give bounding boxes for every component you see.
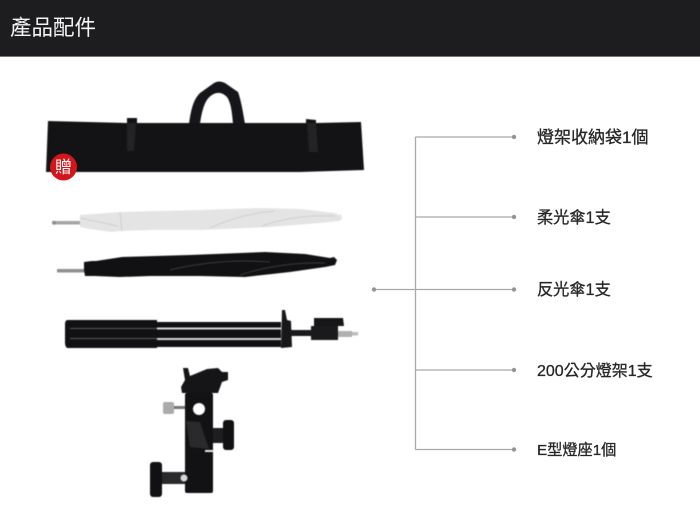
label: light stand: 200公分燈架1支 <box>537 363 653 380</box>
title: 產品配件 <box>10 16 96 40</box>
icon: black reflective umbrella <box>57 252 337 277</box>
label: flash bracket: E型燈座1個 <box>537 442 616 459</box>
label: storage bag: 燈架收納袋1個 <box>537 128 648 147</box>
icon: light stand <box>65 310 358 348</box>
icon: gift badge <box>50 154 77 180</box>
connector lines <box>372 135 516 452</box>
icon: storage bag <box>46 82 364 172</box>
icon: gift badge: 贈 <box>55 158 72 177</box>
header bar <box>0 0 700 57</box>
icon: E-type flash bracket <box>150 368 234 497</box>
label: reflective umbrella: 反光傘1支 <box>537 281 611 299</box>
icon: white translucent umbrella <box>52 208 342 232</box>
label: soft umbrella: 柔光傘1支 <box>537 209 611 227</box>
